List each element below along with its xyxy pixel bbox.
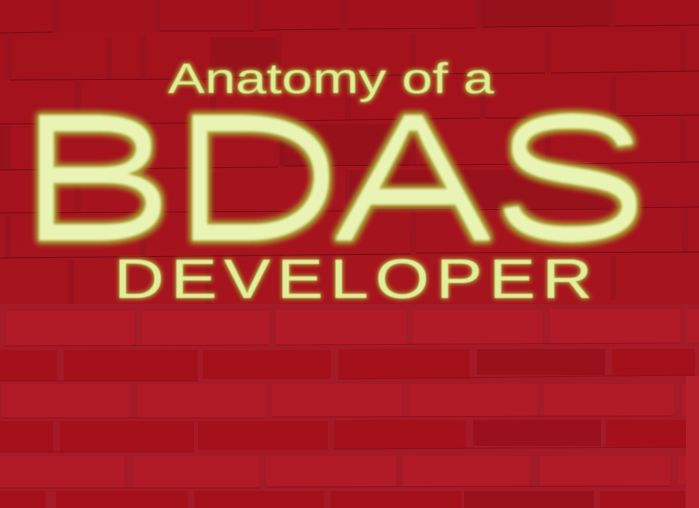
mortar band — [0, 304, 699, 508]
row 6 bricks — [0, 491, 685, 508]
title line: Anatomy of a: Anatomy of a — [168, 55, 494, 103]
right edge — [686, 376, 699, 508]
row 5 bricks — [0, 456, 699, 488]
row 4 bricks — [0, 420, 692, 452]
lower brick wall — [0, 304, 699, 508]
row 2 bricks — [0, 349, 695, 381]
row 1 bricks — [6, 309, 699, 346]
brick shadow lines — [0, 343, 695, 488]
title word: DEVELOPER: DEVELOPER — [114, 249, 592, 310]
row 3 bricks — [2, 384, 699, 418]
title word: BDAS: BDAS — [15, 79, 652, 277]
upper brick wall — [0, 0, 699, 304]
